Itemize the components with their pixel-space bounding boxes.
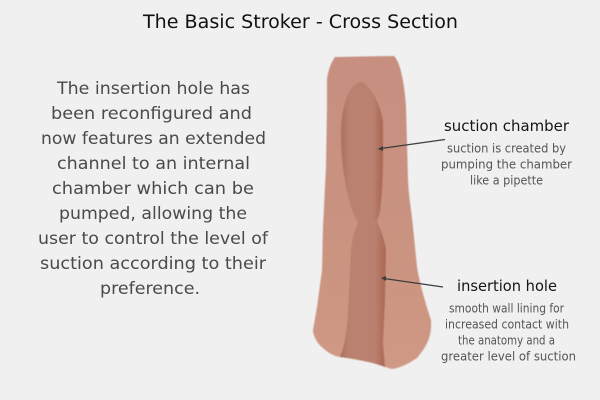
- text block: description: pumped, allowing the: [59, 204, 247, 224]
- text block: description: suction according to their: [40, 254, 266, 274]
- callout: insertion hole: smooth wall lining for: [449, 302, 564, 316]
- stroker body: [313, 56, 431, 369]
- cross section illustration: [313, 56, 431, 369]
- callout: insertion hole: the anatomy and a: [458, 334, 555, 348]
- arrow: insertion hole: [381, 276, 443, 287]
- callout: suction chamber: pumping the chamber: [441, 158, 572, 172]
- callout: suction chamber: suction chamber: [444, 117, 570, 135]
- callout: suction chamber: suction is created by: [447, 142, 566, 156]
- text block: description: chamber which can be: [52, 179, 254, 199]
- text block: description: [38, 79, 269, 299]
- text block: description: now features an extended: [41, 129, 266, 149]
- callout: suction chamber: [441, 117, 572, 188]
- text block: description: been reconfigured and: [51, 104, 252, 124]
- callout: insertion hole: increased contact with: [445, 318, 569, 332]
- text block: description: The insertion hole has: [56, 79, 250, 99]
- callout: insertion hole: insertion hole: [457, 277, 557, 295]
- arrow: suction chamber: [378, 140, 445, 151]
- callout: insertion hole: [441, 277, 576, 364]
- insertion hole cavity: [340, 221, 386, 367]
- title: The Basic Stroker - Cross Section: [142, 12, 458, 33]
- callout: insertion hole: greater level of suction: [441, 350, 576, 364]
- text block: description: channel to an internal: [57, 154, 250, 174]
- callout: suction chamber: like a pipette: [470, 174, 543, 188]
- text block: description: user to control the level of: [38, 229, 269, 249]
- text block: description: preference.: [100, 279, 200, 299]
- suction chamber cavity: [341, 82, 383, 222]
